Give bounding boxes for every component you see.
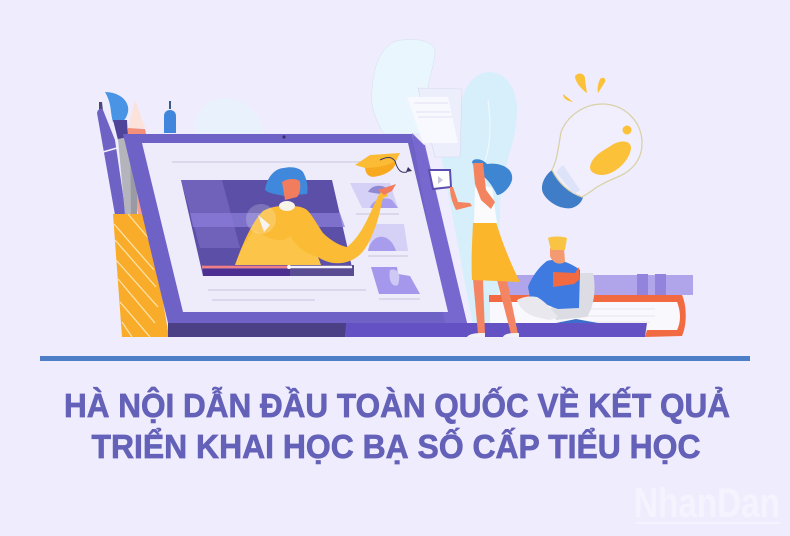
progress bar [202,266,352,268]
teacher on screen [235,167,396,265]
teacher face [282,179,300,200]
laptop frame [123,134,452,323]
teacher hair [265,167,308,196]
boy head and hair [550,248,565,264]
icon: paper sheet [407,88,462,157]
boy torso [528,260,580,309]
boy book [553,267,579,287]
woman legs [473,279,518,334]
orange book [489,295,686,337]
woman shoes [467,333,519,337]
stack of books [489,274,693,337]
icon: light bulb [542,73,642,208]
bulb glow spot [590,142,631,175]
laptop [123,133,647,337]
boy left leg [517,296,558,320]
divider line [40,356,750,361]
title: HÀ NỘI DẪN ĐẦU TOÀN QUỐC VỀ KẾT QUẢ [64,386,730,424]
video thumbnails [350,183,420,294]
play button [246,204,276,234]
teacher body [235,190,388,265]
pen cup with pens and brush [97,92,176,337]
icon: purple pen [97,102,126,215]
graduation cap [355,153,412,177]
teacher collar [279,201,295,211]
laptop base [168,323,647,337]
purple book [500,274,693,295]
title: TRIỂN KHAI HỌC BẠ SỐ CẤP TIỂU HỌC [92,427,700,465]
title [64,386,730,465]
icon: blue marker [164,101,176,133]
bulb base [542,170,583,208]
boy feet [556,319,598,323]
teacher standing with tablet [450,159,520,337]
woman hair [472,159,512,195]
laptop rear panel [412,143,467,323]
pen cup [113,214,169,337]
woman shirt [474,185,497,223]
bulb rays [563,73,605,102]
laptop camera [282,135,286,139]
boy reading [517,236,598,323]
screen text lines [172,162,420,300]
video player [181,180,354,276]
laptop screen [142,143,448,312]
boy right leg [550,273,595,320]
icon: pencil [127,100,146,215]
woman skirt [472,222,520,282]
bulb glass [552,104,642,197]
icon: paint brush [105,92,137,215]
icon: tablet [429,170,451,189]
background plant shapes [195,40,517,336]
woman arm and face [450,163,495,210]
teacher hand [378,184,396,195]
